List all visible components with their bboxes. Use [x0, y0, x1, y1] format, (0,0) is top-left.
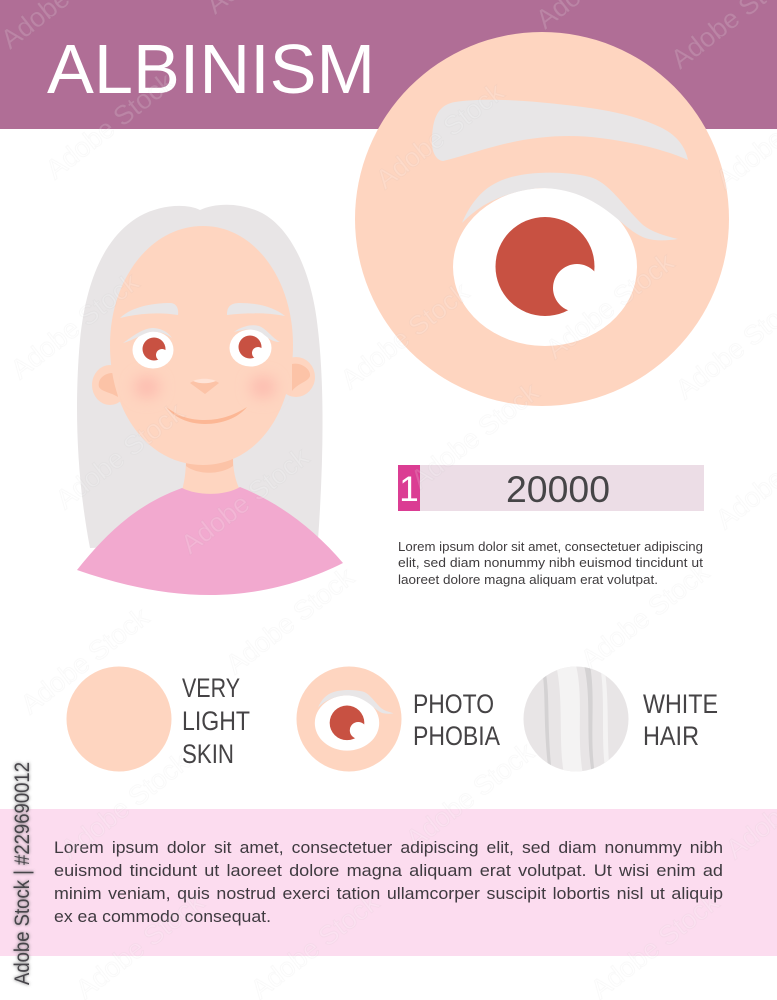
- left eyebrow: [120, 303, 178, 318]
- number badge: 1: [399, 470, 419, 509]
- watermark pattern: Adobe Stock: [175, 442, 315, 560]
- stock ID label: Adobe Stock | #229690012: [11, 762, 34, 985]
- watermark pattern: Adobe Stock: [15, 602, 155, 720]
- watermark pattern: Adobe Stock: [50, 397, 190, 515]
- hair: [77, 205, 323, 548]
- iris highlight, close-up: [553, 264, 601, 312]
- shirt: [77, 487, 343, 595]
- right ear: [277, 357, 315, 397]
- number bar: [420, 465, 704, 511]
- bottom text panel: minim veniam, quis nostrud exerci tation ullamcorper suscipit lobortis nisl ut aliquip: [54, 885, 723, 903]
- header banner: [0, 0, 777, 129]
- description text: laoreet dolore magna aliquam erat volutpat.: [398, 572, 658, 587]
- bottom text panel: euismod tincidunt ut laoreet dolore magna aliquam erat volutpat. Ut wisi enim ad: [54, 862, 723, 880]
- eyelashes, close-up: [462, 173, 678, 240]
- symptom: white hair: WHITE: [643, 689, 718, 719]
- bottom text panel: ex ea commodo consequat.: [54, 908, 271, 926]
- watermark pattern: Adobe Stock: [405, 377, 545, 495]
- mouth: [166, 407, 247, 424]
- left cheek: [134, 376, 160, 398]
- character portrait: [77, 205, 343, 595]
- symptom: photophobia: PHOTO: [413, 689, 494, 719]
- symptom: very light skin: [66, 666, 250, 772]
- number bar: 20000: [506, 469, 610, 510]
- eye white, close-up: [453, 188, 637, 346]
- bottom text panel: [0, 809, 777, 956]
- neck: [182, 455, 240, 498]
- watermark pattern: Adobe Stock: [5, 267, 145, 385]
- watermark pattern: Adobe Stock: [40, 67, 180, 185]
- symptom: photophobia: [296, 666, 500, 772]
- symptom: very light skin: LIGHT: [182, 706, 250, 736]
- symptom: very light skin: VERY: [182, 673, 240, 703]
- big eye close-up circle: [355, 32, 729, 406]
- symptom: white hair: HAIR: [643, 721, 699, 751]
- watermark pattern: Adobe Stock: [335, 277, 475, 395]
- right eyebrow: [227, 303, 285, 316]
- nose: [190, 379, 219, 394]
- iris, close-up: [496, 217, 594, 316]
- symptom: white hair: [524, 665, 718, 775]
- watermark pattern: Adobe Stock: [55, 747, 195, 865]
- left ear: [92, 365, 128, 405]
- neck shadow: [186, 455, 233, 473]
- symptom: photophobia: PHOBIA: [413, 721, 500, 751]
- title: ALBINISM: [47, 30, 375, 108]
- symptom: very light skin: SKIN: [182, 739, 234, 769]
- description text: [398, 539, 703, 587]
- watermark pattern: Adobe Stock: [400, 737, 540, 855]
- stock ID label: Adobe Stock | #229690012: [11, 762, 34, 985]
- eyebrow, close-up: [432, 100, 688, 161]
- right eye: [230, 325, 280, 366]
- watermark pattern: Adobe Stock: [540, 247, 680, 365]
- watermark pattern: Adobe Stock: [220, 562, 360, 680]
- description text: elit, sed diam nonummy nibh euismod tincidunt ut: [398, 555, 703, 570]
- description text: Lorem ipsum dolor sit amet, consectetuer adipiscing: [398, 539, 703, 554]
- right cheek: [250, 376, 276, 398]
- watermark pattern: Adobe Stock: [575, 557, 715, 675]
- left eye: [123, 328, 174, 368]
- watermark pattern: Adobe Stock: [370, 77, 510, 195]
- face: [110, 226, 293, 465]
- bottom text panel: Lorem ipsum dolor sit amet, consectetuer adipiscing elit, sed diam nonummy nibh: [54, 839, 723, 857]
